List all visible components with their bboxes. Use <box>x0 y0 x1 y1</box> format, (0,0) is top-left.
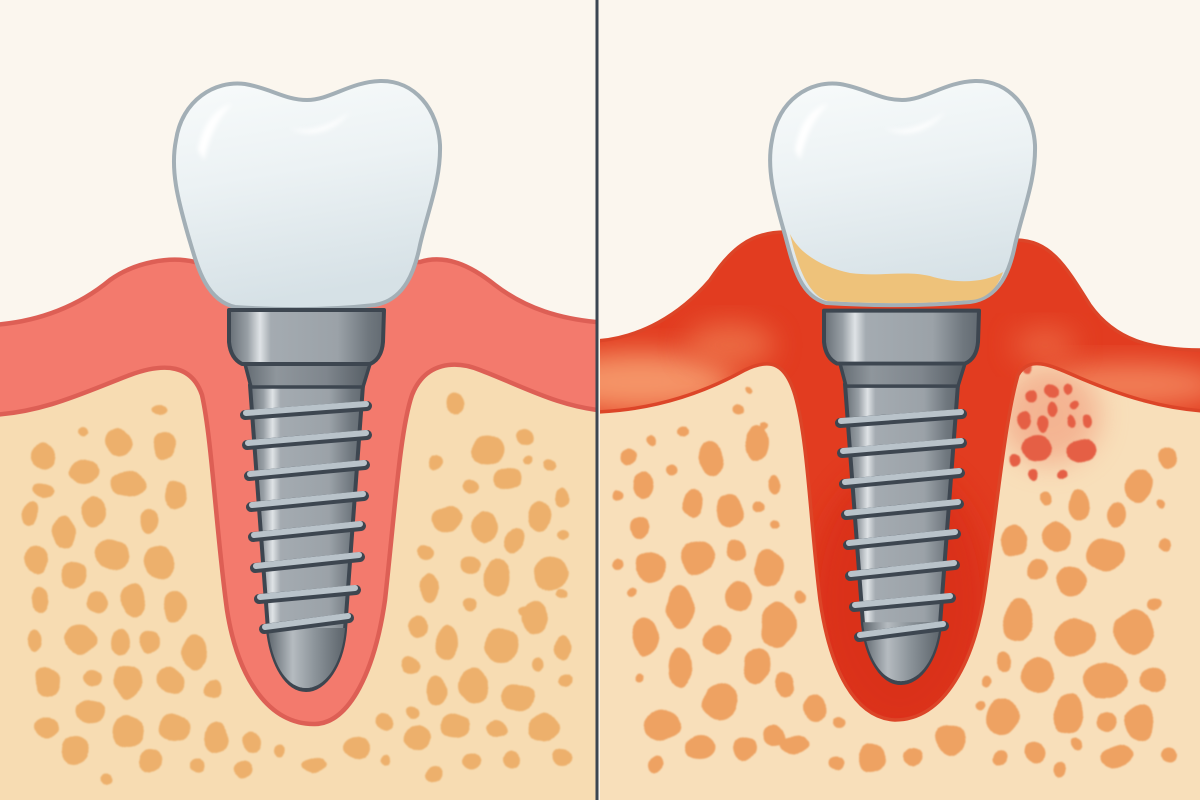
bone pores: inflamed <box>613 387 1177 777</box>
gum: inflamed <box>600 230 1200 722</box>
gum colour patches <box>545 323 1200 735</box>
crown: healthy <box>174 81 440 309</box>
red inflamed pores <box>1009 362 1098 481</box>
panel: inflamed implant <box>545 81 1200 800</box>
bone pores: healthy <box>22 392 572 786</box>
bone: healthy <box>0 340 596 800</box>
crown: inflamed <box>770 81 1035 305</box>
implant: healthy <box>229 310 384 690</box>
implant: inflamed <box>824 311 979 683</box>
divider <box>596 0 598 800</box>
gum: healthy <box>0 259 608 724</box>
exposed cement band <box>790 234 1003 303</box>
panel: healthy implant <box>0 81 608 800</box>
inflammation bleed in bone <box>1000 365 1100 465</box>
bone: inflamed <box>600 360 1200 800</box>
gum outline <box>596 232 1200 720</box>
